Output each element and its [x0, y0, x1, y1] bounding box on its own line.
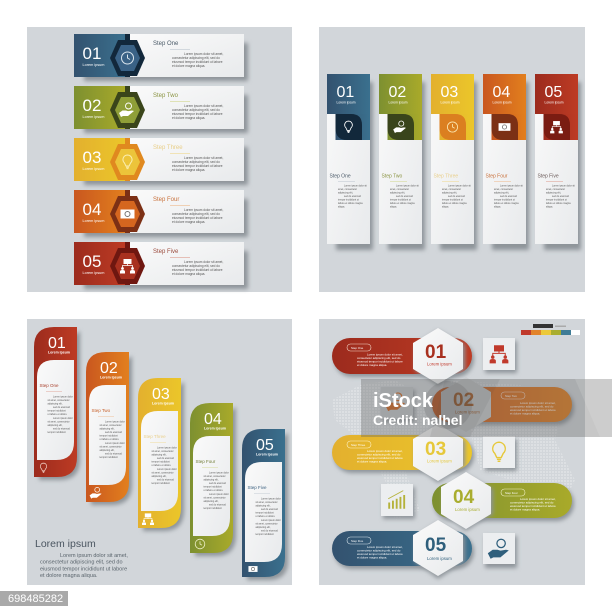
card 4: 04 — [204, 411, 222, 428]
card 5: Lorem ipsum — [256, 452, 278, 456]
step 1 banner: Lorem ipsum dolor sit amet, — [184, 52, 223, 56]
column 3: aliqua. — [442, 206, 449, 208]
card 3: Lorem ipsum — [152, 402, 174, 406]
card 3: tempor incididunt — [152, 460, 170, 464]
card 2: 02 — [100, 360, 118, 377]
column 4: labore et dolore magna — [494, 202, 519, 205]
row 5 — [332, 520, 517, 579]
lorem ipsum text block: consectetur adipiscing elit, sed do — [40, 560, 123, 566]
watermark band: iStock — [373, 390, 434, 412]
card 2: sit amet, consectetur — [100, 446, 122, 448]
card 2: Step Two — [92, 408, 111, 413]
lorem ipsum text block: et dolore magna aliqua. — [40, 573, 98, 579]
hexagon icon — [110, 40, 145, 76]
card 1: sit amet, consectetur — [48, 399, 70, 402]
row 3: 03 — [425, 439, 446, 460]
panel: vertical columns — [319, 27, 585, 292]
column 2: tempor incididunt ut — [390, 198, 411, 202]
icon: money — [248, 566, 258, 572]
icon: clock — [195, 539, 205, 549]
row 1: Lorem ipsum — [427, 362, 452, 367]
card 5: 05 — [256, 437, 274, 454]
card 3: sit amet, consectetur — [152, 450, 174, 453]
card 5: adipiscing elit, — [256, 526, 271, 529]
column 2: Lorem ipsum — [388, 100, 408, 104]
row 5: Lorem ipsum dolor sit amet, — [367, 545, 403, 549]
card 2: adipiscing elit, — [100, 428, 115, 430]
row 3: Lorem ipsum — [427, 458, 452, 464]
step 4 banner: Step Four — [153, 197, 179, 203]
column 4: Lorem ipsum — [492, 100, 512, 104]
row 4: 04 — [453, 487, 475, 508]
card 5: Lorem ipsum dolor — [261, 519, 281, 522]
column 5: Lorem ipsum dolor sit — [552, 184, 575, 188]
column 1: 01 — [336, 84, 354, 101]
column 3: labore et dolore magna — [442, 202, 467, 205]
row 4 — [381, 472, 574, 531]
row 4: Lorem ipsum — [455, 507, 480, 512]
step 4 banner: consectetur adipiscing elit, sed do — [172, 212, 220, 216]
row 2: Lorem ipsum dolor sit amet, — [520, 401, 556, 405]
watermark band — [361, 379, 612, 437]
step 5 banner: consectetur adipiscing elit, sed do — [172, 264, 220, 268]
column 1: Step One — [330, 174, 351, 180]
column 3: Lorem ipsum dolor sit — [448, 184, 471, 188]
card 4: sit amet, consectetur — [204, 475, 226, 478]
step 2 banner: Step Two — [153, 93, 179, 99]
card 1: sed do eiusmod — [53, 406, 71, 409]
row 3: et dolore magna aliqua. — [357, 460, 387, 464]
step 5 banner: eiusmod tempor incididunt ut labore — [172, 268, 223, 272]
column 5: adipiscing elit, — [546, 192, 561, 194]
column 4: sed do eiusmod — [500, 195, 518, 198]
row 1: 01 — [425, 342, 447, 363]
card 3: Step Three — [144, 434, 166, 439]
row 3: Step Three — [351, 443, 366, 447]
row 3: consectetur adipiscing elit, sed do — [357, 452, 401, 456]
column 4: 04 — [492, 84, 510, 101]
column 3: tempor incididunt ut — [442, 198, 463, 202]
card 1 — [34, 327, 80, 480]
column 3: Step Three — [434, 174, 458, 180]
column 1: labore et dolore magna — [338, 202, 363, 205]
card 1: Lorem ipsum dolor — [53, 417, 73, 420]
column 5: 05 — [544, 84, 562, 101]
card 3: sed do eiusmod — [157, 478, 175, 482]
column 1: aliqua. — [338, 206, 345, 208]
column 4 — [483, 74, 529, 250]
card 5: sed do eiusmod — [261, 508, 279, 511]
column 5: labore et dolore magna — [546, 202, 571, 205]
card 1: tempor incididunt — [48, 431, 66, 434]
card 1: Lorem ipsum — [48, 350, 70, 354]
step 5 banner: Lorem ipsum dolor sit amet, — [184, 260, 223, 264]
column 5: aliqua. — [546, 206, 553, 208]
column 2: labore et dolore magna — [390, 202, 415, 205]
card 2: adipiscing elit, — [100, 449, 115, 452]
card 5: tempor incididunt — [256, 533, 274, 536]
card 3: sit amet, consectetur — [152, 472, 174, 474]
panel: horizontal banners — [27, 27, 292, 292]
hexagon icon — [110, 248, 145, 284]
card 3: Lorem ipsum dolor — [157, 446, 177, 450]
row 5: Step Five — [351, 539, 364, 543]
column 5: Lorem ipsum — [544, 100, 564, 104]
row 2: Lorem ipsum — [455, 410, 480, 414]
card 2: sed do eiusmod — [105, 452, 123, 456]
row 4: Step Four — [505, 491, 518, 495]
column 3: Lorem ipsum — [440, 100, 460, 104]
step 1 banner — [74, 34, 248, 81]
step 1 banner: 01 — [82, 44, 101, 63]
card 4 — [190, 403, 236, 556]
card 4: tempor incididunt — [204, 486, 222, 488]
card 3: sed do eiusmod — [157, 457, 175, 460]
card 3: 03 — [152, 386, 170, 403]
column 2: aliqua. — [390, 206, 397, 208]
column 4: aliqua. — [494, 206, 501, 208]
row 3 — [332, 424, 517, 483]
card 4: Lorem ipsum — [204, 426, 226, 430]
step 1 banner: Step One — [153, 41, 179, 47]
column 2: amet, consectetur — [390, 188, 409, 191]
card 3 — [138, 378, 184, 531]
row 5: consectetur adipiscing elit, sed do — [357, 548, 401, 552]
row 4: eiusmod tempor incididunt ut labore — [510, 504, 556, 508]
row 1: consectetur adipiscing elit, sed do — [357, 356, 401, 360]
column 5 — [535, 74, 581, 250]
column 2: Step Two — [382, 174, 402, 180]
panel: staggered cards — [27, 319, 292, 585]
card 5: adipiscing elit, — [256, 504, 271, 508]
step 2 banner: 02 — [82, 96, 101, 115]
icon: bulb — [40, 463, 47, 473]
column 2: adipiscing elit, — [390, 192, 405, 194]
column 4: tempor incididunt ut — [494, 198, 515, 202]
row 1 — [332, 328, 517, 386]
step 3 banner — [74, 138, 248, 185]
card 5: Step Five — [248, 485, 267, 490]
card 4: Lorem ipsum dolor — [209, 493, 229, 496]
leaf icon — [544, 114, 570, 140]
step 4 banner: Lorem ipsum — [82, 219, 104, 223]
step 5 banner — [74, 242, 248, 289]
card 3: adipiscing elit, — [152, 475, 167, 478]
step 1 banner: eiusmod tempor incididunt ut labore — [172, 60, 223, 64]
card 2: Lorem ipsum dolor — [105, 420, 125, 424]
step 2 banner: et dolore magna aliqua. — [172, 116, 205, 120]
card 1: adipiscing elit, — [48, 424, 63, 427]
step 5 banner: et dolore magna aliqua. — [172, 272, 205, 276]
card 5: Lorem ipsum dolor — [261, 498, 281, 500]
row 5: 05 — [425, 535, 447, 556]
column 3 — [431, 74, 477, 250]
column 2: Lorem ipsum dolor sit — [396, 184, 419, 188]
column 5: amet, consectetur — [546, 188, 565, 191]
row 1: Lorem ipsum dolor sit amet, — [367, 352, 403, 356]
card 4: tempor incididunt — [204, 507, 222, 510]
column 4: Lorem ipsum dolor sit — [500, 184, 523, 188]
card 2 — [86, 352, 132, 505]
card 2: sed do eiusmod — [105, 431, 123, 434]
panel: hexagon pills — [319, 319, 585, 585]
column 2 — [379, 74, 425, 250]
leaf icon — [336, 114, 362, 140]
column 3: 03 — [440, 84, 458, 101]
card 5: sit amet, consectetur — [256, 501, 278, 504]
step 2 banner: eiusmod tempor incididunt ut labore — [172, 112, 223, 116]
card 2: Lorem ipsum — [100, 376, 122, 380]
column 1 — [327, 74, 373, 250]
step 3 banner: Lorem ipsum — [82, 167, 104, 171]
row 2: 02 — [453, 390, 474, 411]
card 4: ut labore et dolore — [204, 489, 223, 492]
hexagon icon — [110, 92, 145, 128]
step 1 banner: consectetur adipiscing elit, sed do — [172, 56, 220, 60]
column 1: Lorem ipsum — [336, 100, 356, 104]
column 1: Lorem ipsum dolor sit — [344, 184, 367, 188]
row 2: Step Two — [505, 394, 517, 398]
card 4: sed do eiusmod — [209, 482, 227, 485]
step 2 banner: Lorem ipsum — [82, 115, 104, 119]
row 2 — [381, 377, 574, 432]
card 5: sed do eiusmod — [261, 530, 279, 532]
card 2: ut labore et dolore — [100, 438, 119, 441]
card 3: adipiscing elit, — [152, 454, 167, 456]
column 2: 02 — [388, 84, 406, 101]
step 4 banner: 04 — [82, 200, 101, 219]
step 3 banner: Step Three — [153, 145, 183, 151]
row 4: consectetur adipiscing elit, sed do — [510, 500, 554, 504]
row 4: Lorem ipsum dolor sit amet, — [520, 497, 556, 501]
leaf icon — [440, 114, 466, 140]
row 5: eiusmod tempor incididunt ut labore — [357, 552, 403, 556]
icon: hand — [90, 487, 102, 499]
card 1: 01 — [48, 335, 66, 352]
card 4: adipiscing elit, — [204, 500, 219, 503]
column 1: tempor incididunt ut — [338, 198, 359, 202]
row 2: et dolore magna aliqua. — [510, 412, 540, 416]
icon: org chart — [142, 513, 154, 525]
column 1: sed do eiusmod — [344, 195, 362, 198]
column 5: tempor incididunt ut — [546, 198, 567, 202]
card 5: sit amet, consectetur — [256, 522, 278, 526]
step 5 banner: Step Five — [153, 249, 179, 255]
row 2: eiusmod tempor incididunt ut labore — [510, 408, 556, 412]
image id badge: 698485282 — [8, 593, 63, 605]
hexagon icon — [110, 196, 145, 232]
row 4: et dolore magna aliqua. — [510, 508, 540, 512]
column 3: sed do eiusmod — [448, 195, 466, 198]
row 2: consectetur adipiscing elit, sed do — [510, 404, 554, 408]
row 3: Lorem ipsum dolor sit amet, — [367, 449, 403, 453]
column 4: Step Four — [486, 174, 508, 180]
step 2 banner: Lorem ipsum dolor sit amet, — [184, 104, 223, 108]
lorem ipsum text block: Lorem ipsum dolor sit amet, — [60, 553, 128, 559]
card 4: Step Four — [196, 459, 216, 464]
lorem ipsum text block: eiusmod tempor incididunt ut labore — [40, 566, 127, 572]
card 1: Lorem ipsum dolor — [53, 396, 73, 398]
step 4 banner: Lorem ipsum dolor sit amet, — [184, 208, 223, 212]
column 1: amet, consectetur — [338, 188, 357, 191]
column 3: amet, consectetur — [442, 188, 461, 191]
leaf icon — [492, 114, 518, 140]
card 1: Step One — [40, 383, 59, 388]
image id badge — [0, 591, 68, 606]
step 5 banner: 05 — [82, 252, 101, 271]
card 4: sed do eiusmod — [209, 504, 227, 506]
column 1: adipiscing elit, — [338, 192, 353, 194]
card 3: tempor incididunt — [152, 482, 170, 485]
leaf icon — [388, 114, 414, 140]
column 4: adipiscing elit, — [494, 192, 509, 194]
column 4: amet, consectetur — [494, 188, 513, 191]
card 5 — [242, 429, 288, 580]
column 2: sed do eiusmod — [396, 195, 414, 198]
row 3: eiusmod tempor incididunt ut labore — [357, 456, 403, 460]
step 3 banner: consectetur adipiscing elit, sed do — [172, 160, 220, 164]
card 2: tempor incididunt — [100, 434, 118, 438]
card 3: Lorem ipsum dolor — [157, 468, 177, 471]
lorem ipsum text block — [35, 538, 128, 579]
card 4: adipiscing elit, — [204, 478, 219, 482]
card 1: tempor incididunt — [48, 410, 66, 412]
step 4 banner — [74, 190, 248, 237]
card 2: tempor incididunt — [100, 456, 118, 459]
step 2 banner — [74, 86, 248, 133]
step 3 banner: et dolore magna aliqua. — [172, 168, 205, 172]
step 3 banner: Lorem ipsum dolor sit amet, — [184, 156, 223, 160]
row 1: et dolore magna aliqua. — [357, 363, 387, 367]
row 5: et dolore magna aliqua. — [357, 556, 387, 560]
row 1: Step One — [351, 346, 364, 350]
step 5 banner: Lorem ipsum — [82, 271, 104, 275]
watermark band: Credit: nalhel — [373, 412, 462, 428]
card 5: tempor incididunt — [256, 512, 274, 514]
step 3 banner: eiusmod tempor incididunt ut labore — [172, 164, 223, 168]
step 4 banner: eiusmod tempor incididunt ut labore — [172, 216, 223, 220]
card 4: sit amet, consectetur — [204, 496, 226, 500]
step 3 banner: 03 — [82, 148, 101, 167]
step 4 banner: et dolore magna aliqua. — [172, 220, 205, 224]
colour legend — [521, 324, 580, 335]
row 1: eiusmod tempor incididunt ut labore — [357, 360, 403, 364]
step 1 banner: et dolore magna aliqua. — [172, 64, 205, 68]
card 1: ut labore et dolore — [48, 413, 67, 416]
card 2: Lorem ipsum dolor — [105, 442, 125, 445]
step 2 banner: consectetur adipiscing elit, sed do — [172, 108, 220, 112]
card 1: sed do eiusmod — [53, 428, 71, 430]
lorem ipsum text block: Lorem ipsum — [35, 538, 96, 550]
card 1: sit amet, consectetur — [48, 420, 70, 424]
hexagon icon — [110, 144, 145, 180]
card 2: sit amet, consectetur — [100, 424, 122, 427]
column 5: sed do eiusmod — [552, 195, 570, 198]
card 3: ut labore et dolore — [152, 464, 171, 467]
column 3: adipiscing elit, — [442, 192, 457, 194]
row 5: Lorem ipsum — [427, 556, 452, 561]
world map dots — [332, 380, 575, 520]
card 4: Lorem ipsum dolor — [209, 472, 229, 474]
card 1: adipiscing elit, — [48, 402, 63, 406]
column 5: Step Five — [538, 174, 559, 180]
card 5: ut labore et dolore — [256, 515, 275, 518]
step 1 banner: Lorem ipsum — [82, 63, 104, 67]
